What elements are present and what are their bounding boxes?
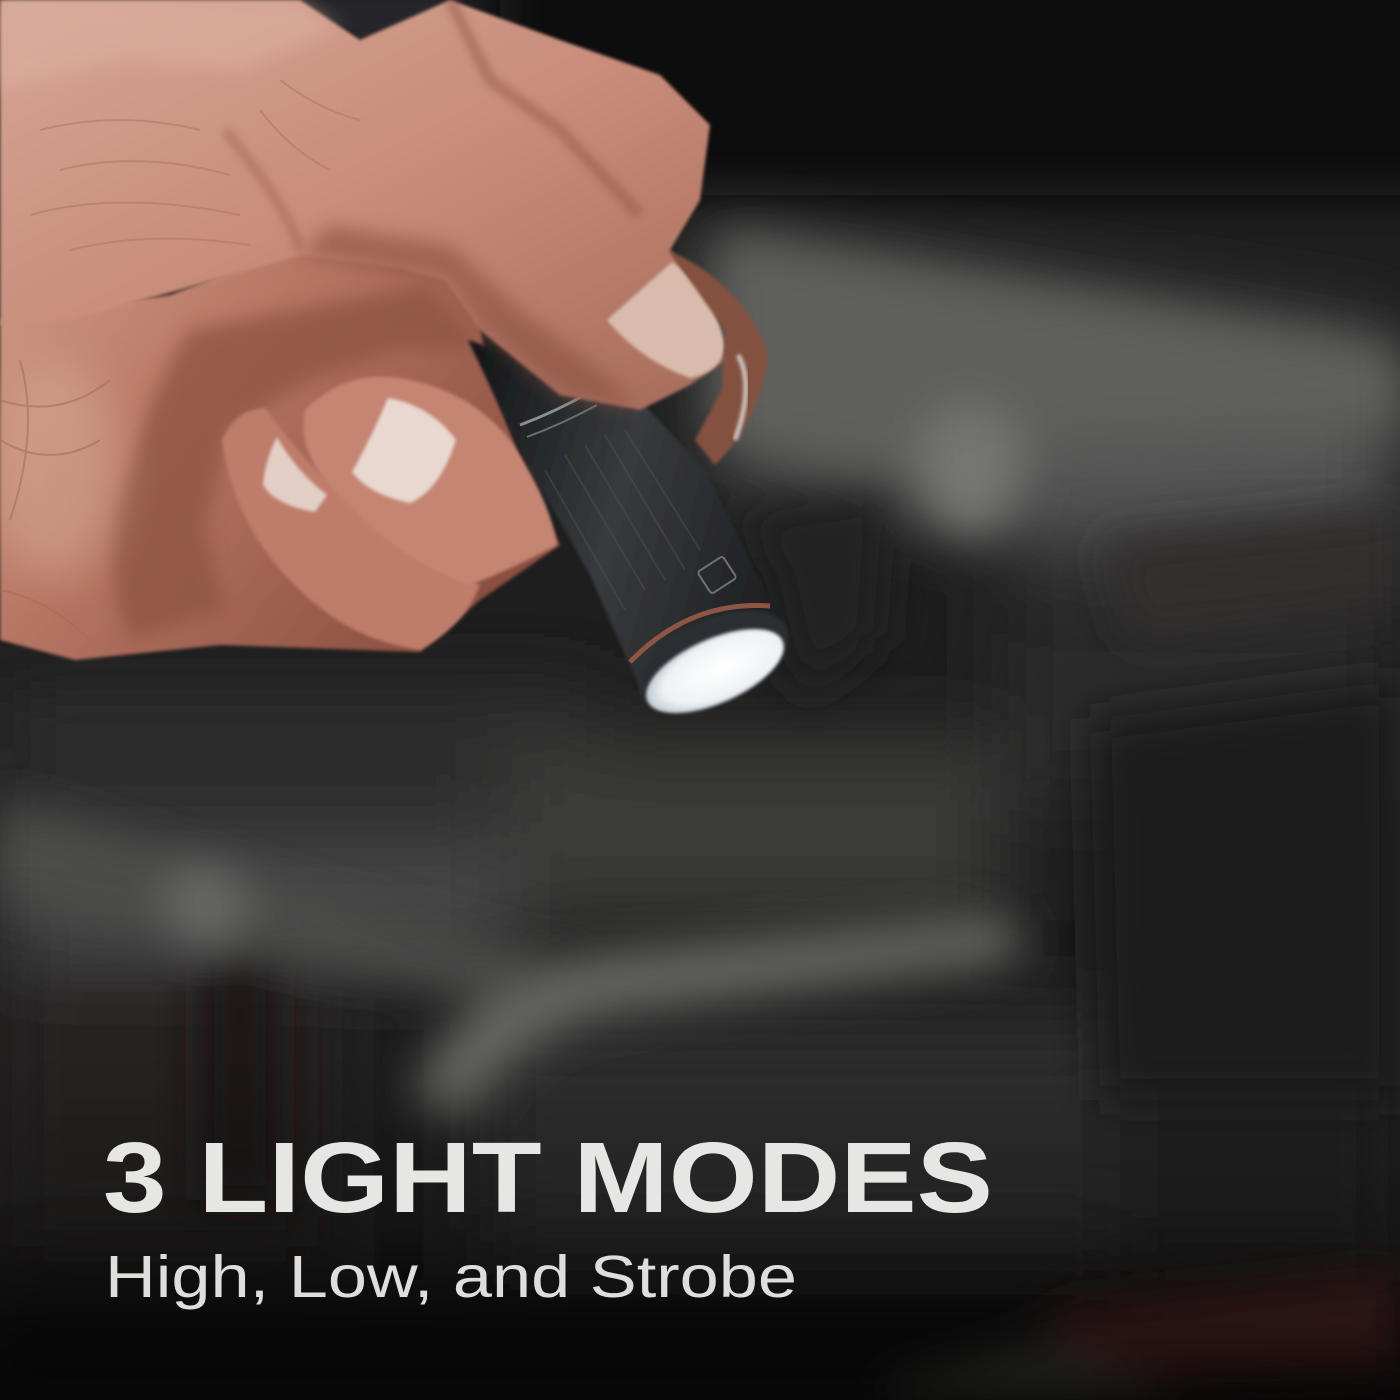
deep crease shadow [112,285,480,640]
title: 3 LIGHT MODES: 3 LIGHT MODES [103,1122,993,1234]
far fingertip [668,250,768,465]
flashlight head [624,589,804,735]
ring finger [222,408,480,650]
orange ring [630,605,770,662]
flashlight [300,0,804,735]
thumb and index finger [0,0,768,650]
palm skin lines [0,360,110,640]
knuckle crease [225,130,300,250]
middle finger [303,377,557,585]
thumb nail [607,262,725,378]
flashlight barrel [468,340,785,700]
flashlight upper shaft [300,0,495,90]
barrel logo [697,556,737,594]
under-finger shadow [300,225,640,410]
subtitle: High, Low, and Strobe: High, Low, and Strobe [105,1244,797,1310]
barrel ring [520,392,590,425]
barrel knurling [545,430,700,610]
ring fingernail [263,437,327,512]
lit lens [634,612,796,730]
index finger and thumb mass [0,0,725,410]
skin wrinkles [30,80,360,250]
palm of hand [0,245,560,660]
palm highlight [0,360,120,580]
ring highlight [735,355,746,440]
middle fingernail [352,398,456,503]
